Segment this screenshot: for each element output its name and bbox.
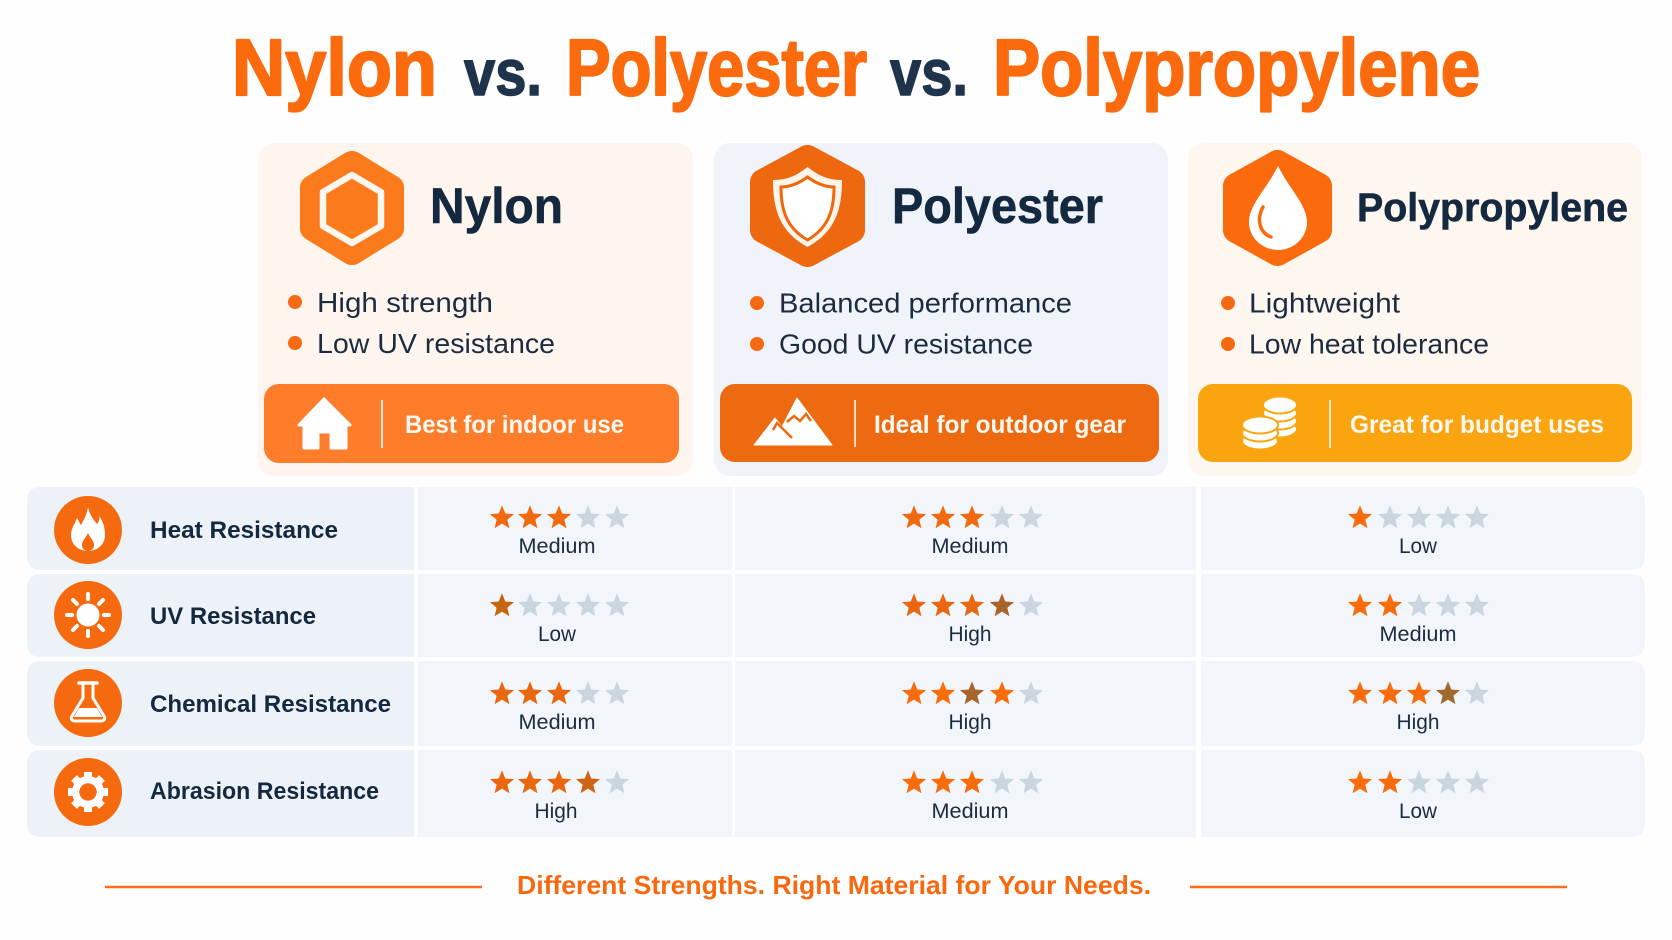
icon: sun [54, 581, 122, 649]
bullet list: Nylon [288, 287, 555, 359]
row: Heat Resistance [27, 487, 1645, 570]
panel: Nylon [258, 143, 693, 476]
rating: Polyester abrasion [902, 770, 1043, 823]
callout: ideal for outdoor gear [720, 384, 1159, 462]
panel: Polyester [714, 143, 1168, 476]
callout: best for indoor use: Best for indoor use [405, 411, 624, 439]
icon: house [299, 399, 350, 448]
rating: Polyester UV [902, 593, 1043, 646]
title [232, 23, 1480, 112]
bullet list: Nylon: High strength [317, 287, 493, 318]
rating: Polyester heat [902, 505, 1043, 558]
title: Polypropylene [993, 23, 1480, 112]
heading: Polyester: Polyester [892, 178, 1103, 234]
icon: droplet [1236, 163, 1319, 253]
rating: Polypropylene abrasion: Low [1399, 800, 1438, 823]
bullet list: Polypropylene [1221, 288, 1489, 360]
bullet list: Polyester: Good UV resistance [779, 328, 1033, 360]
icon: shield [763, 158, 852, 254]
rating: Nylon heat: Medium [518, 535, 596, 558]
rating: Nylon abrasion: High [534, 800, 578, 823]
rating: Nylon chemical [490, 681, 629, 734]
icon: mountains [754, 398, 832, 445]
title: vs. [890, 36, 968, 109]
rating: Polyester abrasion: Medium [932, 800, 1008, 823]
callout: great for budget uses: Great for budget uses [1350, 411, 1604, 439]
rating: Polypropylene heat: Low [1399, 535, 1438, 558]
rating: Nylon heat [490, 505, 629, 558]
heading: Nylon: Nylon [430, 178, 563, 234]
bullet list: Polypropylene: Lightweight [1249, 288, 1400, 318]
rating: Polypropylene chemical: High [1396, 711, 1440, 734]
title: Polyester [566, 23, 867, 112]
icon: flask [54, 669, 122, 737]
title: Nylon [232, 23, 437, 112]
rating: Polyester heat: Medium [932, 535, 1008, 558]
footer tagline: Different Strengths. Right Material for Your Needs. [517, 870, 1151, 900]
title: vs. [464, 36, 542, 109]
rating: Polypropylene abrasion [1348, 770, 1489, 823]
rating: Polypropylene chemical [1348, 681, 1489, 734]
row: Heat Resistance: Heat Resistance [150, 517, 338, 544]
icon: flame [54, 496, 122, 564]
row: Abrasion Resistance [27, 750, 1645, 837]
row: UV Resistance [27, 574, 1645, 657]
rating: Nylon chemical: Medium [518, 711, 596, 734]
rating: Polypropylene heat [1348, 505, 1489, 558]
heading: Polypropylene: Polypropylene [1357, 186, 1628, 230]
rating: Nylon UV: Low [538, 623, 577, 646]
panel: Polypropylene [1188, 143, 1642, 476]
rating: Polyester UV: High [948, 623, 992, 646]
bullet list: Polypropylene: Low heat tolerance [1249, 328, 1489, 360]
row: Chemical Resistance: Chemical Resistance [150, 691, 391, 718]
icon: gear [54, 758, 122, 826]
callout: ideal for outdoor gear: Ideal for outdoor gear [874, 411, 1126, 439]
row: Abrasion Resistance: Abrasion Resistance [150, 778, 379, 805]
panel: comparison table [27, 487, 1645, 837]
bullet list: Polyester: Balanced performance [779, 288, 1072, 318]
rating: Polyester chemical: High [948, 711, 992, 734]
row: UV Resistance: UV Resistance [150, 603, 316, 630]
icon: hexagon [313, 164, 391, 252]
row: Chemical Resistance [27, 661, 1645, 746]
bullet list: Nylon: Low UV resistance [317, 328, 555, 359]
rating: Nylon UV [490, 593, 629, 646]
callout: best for indoor use [264, 384, 679, 463]
rating: Nylon abrasion [490, 770, 629, 823]
icon: coins [1242, 396, 1297, 450]
bullet list: Polyester [750, 288, 1072, 360]
rating: Polypropylene UV: Medium [1380, 623, 1456, 646]
rating: Polyester chemical [902, 681, 1043, 734]
rating: Polypropylene UV [1348, 593, 1489, 646]
callout: great for budget uses [1198, 384, 1632, 462]
